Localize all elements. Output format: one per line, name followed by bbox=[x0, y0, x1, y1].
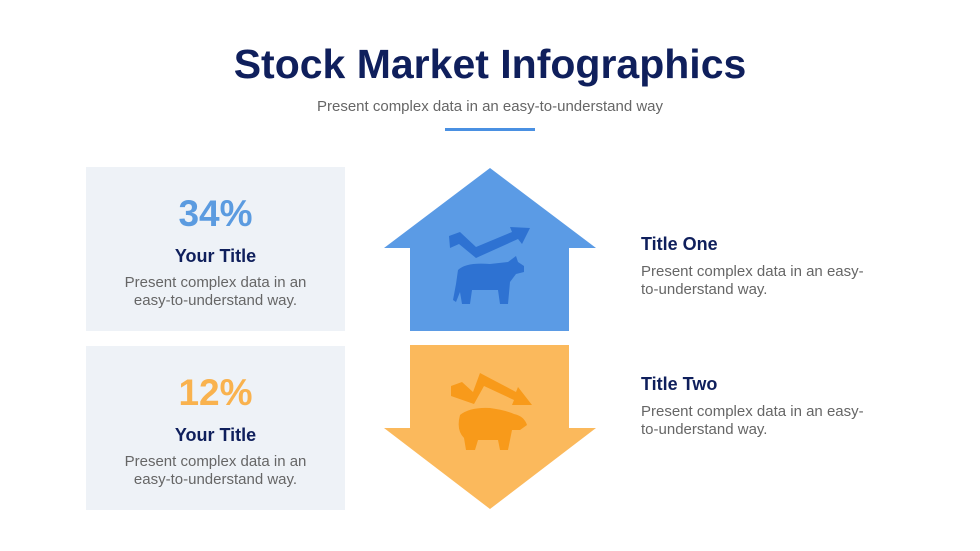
panel text: easy-to-understand way. bbox=[134, 292, 297, 309]
right text: Title One: Title One bbox=[641, 234, 718, 254]
right text: Title Two: Title Two bbox=[641, 374, 717, 394]
right desc two bbox=[641, 403, 864, 438]
right desc two: to-understand way. bbox=[641, 421, 767, 438]
subtitle: Present complex data in an easy-to-understand way bbox=[317, 98, 663, 115]
panel text: easy-to-understand way. bbox=[134, 471, 297, 488]
panel title: Your Title bbox=[175, 246, 256, 266]
panel text bbox=[125, 453, 306, 488]
panel: 34% bbox=[86, 167, 345, 331]
percentage 34%: 34% bbox=[178, 193, 253, 234]
right desc two: Present complex data in an easy- bbox=[641, 403, 864, 420]
panel title: Your Title bbox=[175, 425, 256, 445]
panel text: Present complex data in an bbox=[125, 274, 306, 291]
panel: 12% bbox=[86, 346, 345, 510]
right desc one: to-understand way. bbox=[641, 281, 767, 298]
title: Stock Market Infographics bbox=[234, 41, 746, 87]
panel text bbox=[125, 274, 306, 309]
right desc one: Present complex data in an easy- bbox=[641, 263, 864, 280]
down arrow with bear bbox=[384, 345, 596, 509]
percentage 12%: 12% bbox=[178, 372, 253, 413]
right desc one bbox=[641, 263, 864, 298]
title underline bbox=[445, 128, 535, 131]
panel text: Present complex data in an bbox=[125, 453, 306, 470]
up arrow with bull bbox=[384, 168, 596, 331]
